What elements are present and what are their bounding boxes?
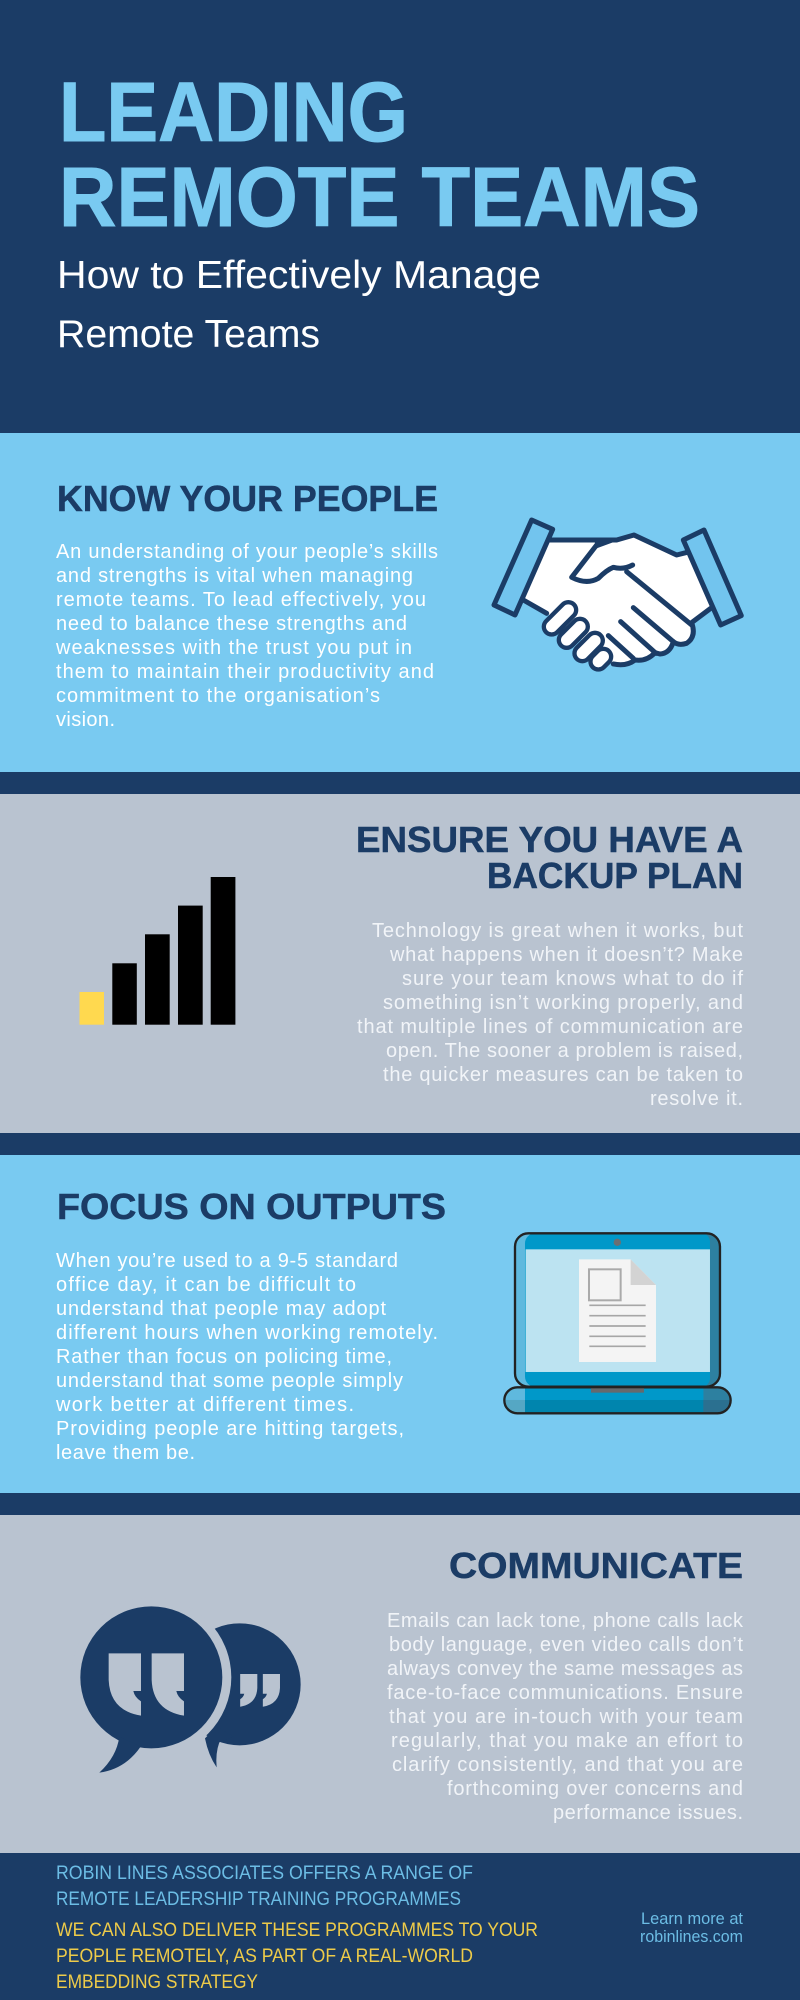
text block: backup plan: what happens when it doesn’t? Make [389, 944, 743, 966]
footer text: remote delivery [56, 1920, 538, 1993]
title: REMOTE TEAMS [59, 150, 700, 244]
text block: backup plan: something isn’t working properly, and [383, 992, 743, 1014]
text block: focus on outputs: different hours when working remotely. [56, 1322, 438, 1344]
text block: focus on outputs: work better at different times. [55, 1394, 354, 1416]
text block: focus on outputs [55, 1250, 438, 1464]
icon: signal bars [80, 877, 235, 1025]
subtitle: Remote Teams [57, 313, 320, 356]
text block: focus on outputs: Rather than focus on policing time, [56, 1346, 392, 1368]
text block: communicate: forthcoming over concerns and [447, 1778, 743, 1800]
footer link [640, 1910, 743, 1946]
text block: focus on outputs: understand that some people simply [56, 1370, 403, 1392]
heading: communicate: COMMUNICATE [449, 1545, 743, 1586]
text block: know your people: remote teams. To lead effectively, you [56, 589, 426, 611]
text block: know your people [55, 541, 438, 731]
heading: ensure you have a backup plan: BACKUP PLAN [487, 855, 743, 896]
text block: know your people: them to maintain their productivity and [56, 661, 434, 683]
panel: focus on outputs [0, 1155, 800, 1493]
text block: backup plan: the quicker measures can be taken to [383, 1064, 743, 1086]
footer link: Learn more at [641, 1910, 743, 1928]
text block: focus on outputs: office day, it can be difficult to [56, 1274, 356, 1296]
text block: know your people: An understanding of your people’s skills [56, 541, 438, 563]
text block: communicate: regularly, that you make an effort to [391, 1730, 743, 1752]
text block: communicate [387, 1610, 744, 1824]
heading: focus on outputs: FOCUS ON OUTPUTS [57, 1186, 446, 1227]
text block: know your people: weaknesses with the trust you put in [55, 637, 412, 659]
text block: backup plan: resolve it. [650, 1088, 743, 1110]
icon: laptop with document [504, 1233, 731, 1413]
text block: communicate: performance issues. [553, 1802, 743, 1824]
text block: communicate: face-to-face communications. Ensure [387, 1682, 743, 1704]
text block: backup plan [357, 920, 743, 1110]
text block: communicate: always convey the same messages as [387, 1658, 743, 1680]
text block: backup plan: open. The sooner a problem is raised, [386, 1040, 743, 1062]
icon: handshake [494, 520, 741, 665]
title: LEADING [59, 65, 408, 159]
text block: backup plan: Technology is great when it works, but [372, 920, 743, 942]
text block: know your people: vision. [56, 709, 115, 731]
text block: communicate: Emails can lack tone, phone calls lack [387, 1610, 744, 1632]
footer panel [56, 1863, 743, 1993]
title [59, 65, 700, 244]
footer text: remote delivery: EMBEDDING STRATEGY [56, 1972, 258, 1993]
text block: backup plan: sure your team knows what to do if [402, 968, 743, 990]
footer link: robinlines.com [640, 1928, 743, 1946]
text block: focus on outputs: understand that people may adopt [56, 1298, 386, 1320]
heading: know your people: KNOW YOUR PEOPLE [57, 478, 438, 519]
text block: communicate: that you are in-touch with your team [389, 1706, 743, 1728]
text block: communicate: body language, even video calls don’t [389, 1634, 743, 1656]
text block: focus on outputs: leave them be. [56, 1442, 195, 1464]
text block: know your people: commitment to the organisation’s [56, 685, 380, 707]
footer text: remote delivery: PEOPLE REMOTELY, AS PART OF A REAL-WORLD [56, 1946, 473, 1967]
heading: ensure you have a backup plan [356, 819, 743, 896]
panel: ensure you have a backup plan [0, 794, 800, 1133]
panel: know your people [0, 433, 800, 772]
footer text: training programmes: REMOTE LEADERSHIP TRAINING PROGRAMMES [56, 1889, 461, 1910]
text block: focus on outputs: Providing people are hitting targets, [56, 1418, 404, 1440]
text block: backup plan: that multiple lines of communication are [357, 1016, 743, 1038]
panel: communicate [0, 1515, 800, 1853]
subtitle: How to Effectively Manage [57, 254, 541, 297]
footer text: training programmes: ROBIN LINES ASSOCIATES OFFERS A RANGE OF [56, 1863, 473, 1884]
text block: communicate: clarify consistently, and that you are [392, 1754, 743, 1776]
footer text: remote delivery: WE CAN ALSO DELIVER THESE PROGRAMMES TO YOUR [56, 1920, 538, 1941]
heading: ensure you have a backup plan: ENSURE YOU HAVE A [356, 819, 743, 860]
text block: know your people: and strengths is vital when managing [56, 565, 413, 587]
text block: focus on outputs: When you’re used to a 9-5 standard [56, 1250, 398, 1272]
subtitle [57, 254, 541, 356]
text block: know your people: need to balance these strengths and [56, 613, 407, 635]
header panel [57, 65, 700, 356]
footer text: training programmes [56, 1863, 473, 1910]
icon: speech bubbles with quote marks [71, 1597, 301, 1773]
